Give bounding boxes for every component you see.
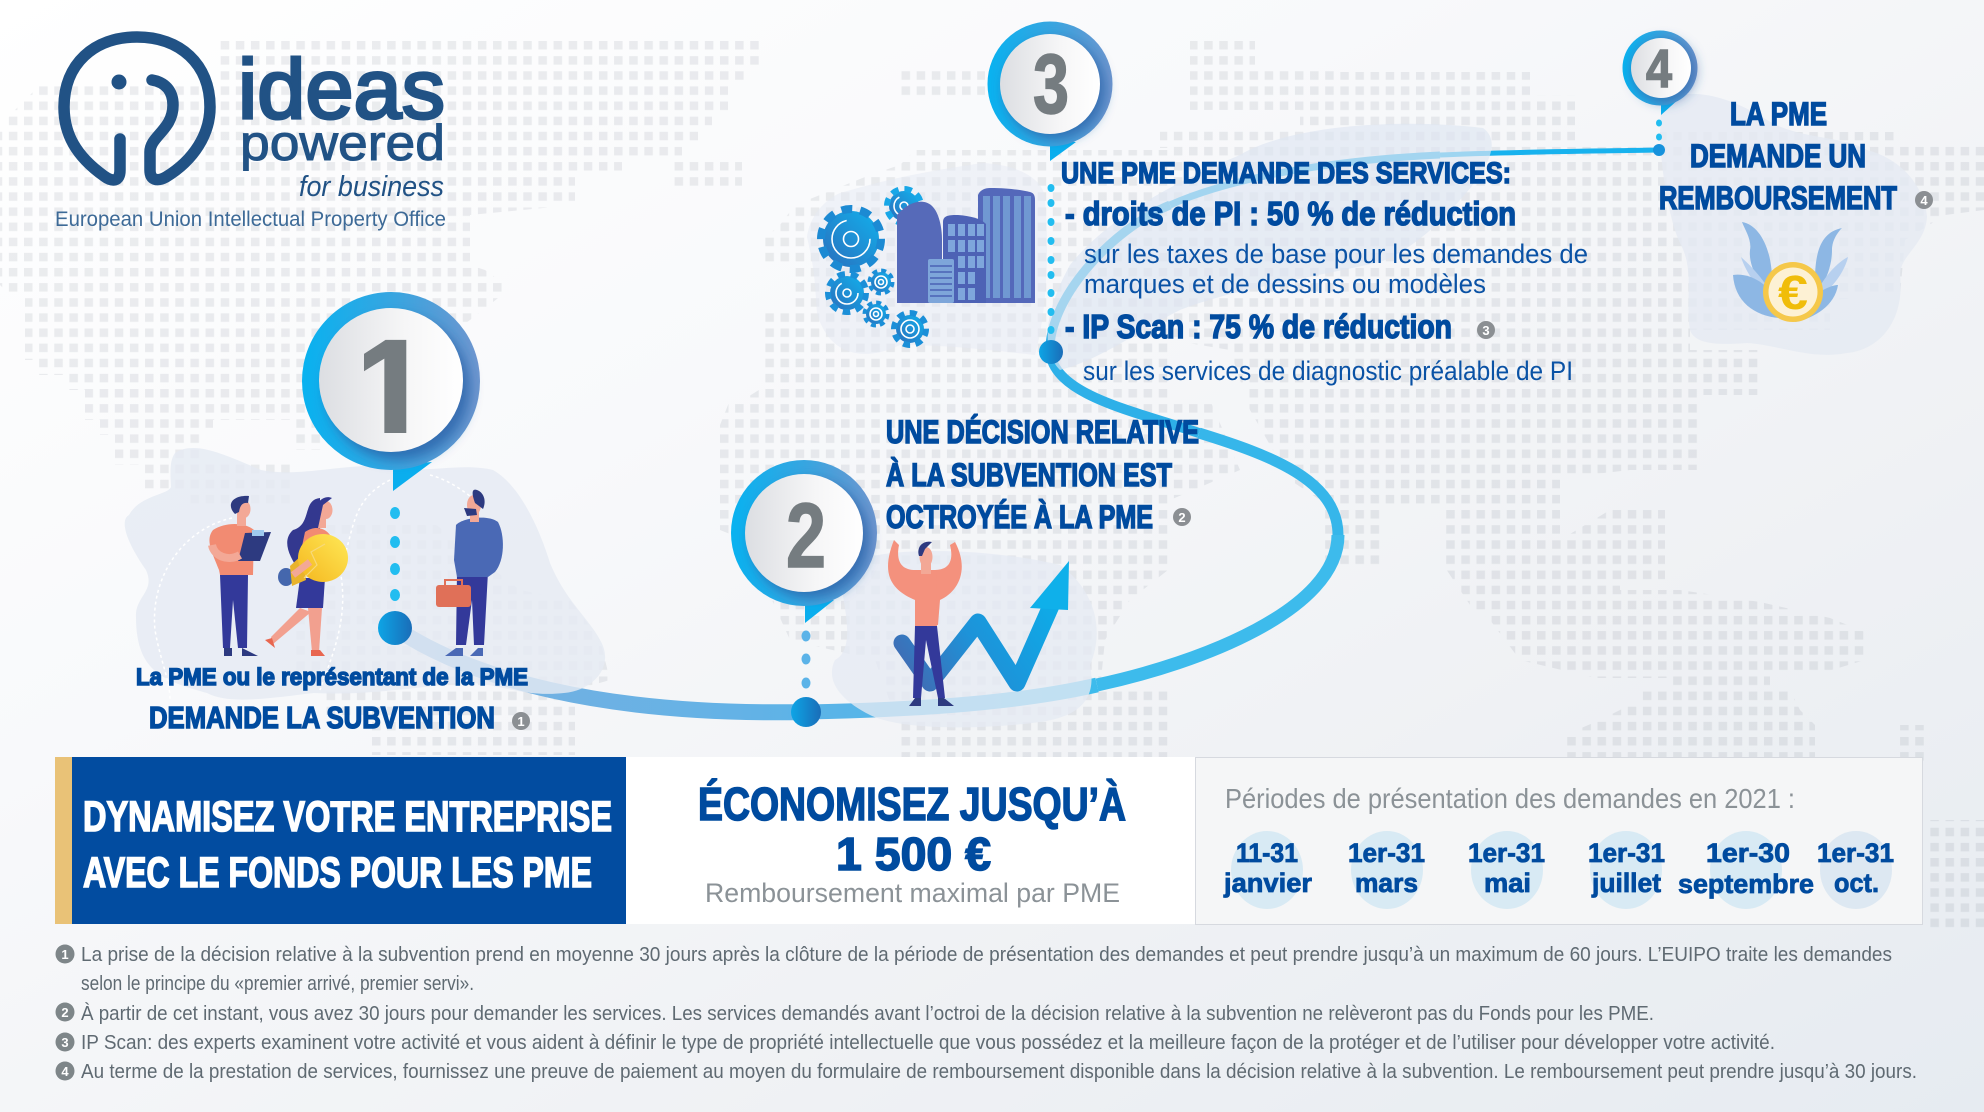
step 4 marker: 4 [1646,39,1672,99]
banner: application periods panel: 1er-31 [1348,838,1425,868]
step 3 marker [988,22,1112,161]
logo: ideas powered for business: powered [240,115,445,171]
step 1 connector dots [378,507,412,645]
illustration: euro coin with leaves: € [1778,267,1808,320]
banner: application periods panel: 1er-30 [1706,838,1790,868]
step 3 connector dots [1039,184,1063,364]
banner [55,757,1922,924]
logo: ideas powered for business: for business [299,171,444,203]
banner: application periods panel [1196,758,1922,924]
illustration: man with briefcase [436,490,503,656]
banner: gold accent [55,757,72,924]
banner: headline panel [72,757,626,924]
step 3 text block: marques et de dessins ou modèles [1084,269,1486,299]
step 2 heading: UNE DÉCISION RELATIVE [886,414,1199,450]
logo mark [64,37,210,180]
journey curve [395,150,1657,712]
dotted world map [0,41,1984,927]
banner: application periods panel: septembre [1678,869,1814,899]
step 2 marker [731,460,877,623]
logo wordmark: ideas [238,42,445,136]
step 4 heading: REMBOURSEMENT [1659,180,1897,216]
footnotes: La prise de la décision relative à la subvention prend en moyenne 30 jours après la clôture de la période de présentation des demandes et peut prendre jusqu’à un maximum de 60 jours. L’EUIPO traite les demandes [81,943,1892,966]
step 4 marker [1622,30,1698,115]
footnotes [56,943,1917,1083]
footnotes: 4 [61,1064,69,1079]
banner: headline panel: AVEC LE FONDS POUR LES PME [83,849,592,897]
step 4 heading: LA PME [1730,96,1827,132]
step 4 connector dots [1653,120,1665,156]
illustration: euro coin with leaves [1733,222,1848,322]
step 3 text block [1061,157,1588,386]
banner: savings panel: Remboursement maximal par PME [705,878,1120,908]
illustration: office buildings [897,188,1035,303]
banner: savings panel: 1 500 € [836,828,991,880]
step 2 marker: 2 [786,485,826,587]
step 4 heading: 4 [1920,193,1928,208]
banner: application periods panel: 11-31 [1236,838,1298,868]
step 3 text block: 3 [1482,323,1490,338]
step 3 text block: - droits de PI : 50 % de réduction [1065,195,1516,232]
step 1 marker: 1 [347,305,436,484]
step 4 heading: DEMANDE UN [1690,138,1866,174]
footnotes: selon le principe du «premier arrivé, premier servi». [81,972,474,995]
step 3 text block: sur les services de diagnostic préalable de PI [1083,356,1573,386]
step 3 marker: 3 [1033,37,1069,131]
step 2 heading [886,414,1199,535]
banner: application periods panel: mars [1355,868,1418,898]
step 1 caption: 1 [517,714,525,729]
illustration: man raising arms [888,540,962,706]
illustration: man with clipboard [209,496,271,656]
banner: application periods panel: janvier [1223,868,1312,898]
step 4 heading [1659,96,1933,216]
banner: application periods panel: 1er-31 [1588,838,1665,868]
step 2 heading: À LA SUBVENTION EST [886,457,1172,493]
step 1 caption [136,664,530,735]
banner: application periods panel: mai [1484,868,1531,898]
logo: ideas powered for business: European Union Intellectual Property Office [55,208,446,231]
dashed orbit around people [154,475,480,700]
step 2 heading: 2 [1178,510,1186,525]
banner: application periods panel: oct. [1834,868,1879,898]
step 3 text block: UNE PME DEMANDE DES SERVICES: [1061,157,1511,190]
illustration: woman with light bulb [265,497,348,656]
step 3 text block: - IP Scan : 75 % de réduction [1065,308,1452,345]
banner: headline panel: DYNAMISEZ VOTRE ENTREPRISE [83,793,612,841]
banner: application periods panel: juillet [1591,868,1661,898]
step 2 connector dots [791,630,821,727]
banner: savings panel [626,757,1196,924]
footnotes: À partir de cet instant, vous avez 30 jours pour demander les services. Les services demandés avant l’octroi de la décision relative à la subvention ne relèveront pas du Fonds pour les PME. [81,1002,1654,1025]
banner: savings panel: ÉCONOMISEZ JUSQU’À [698,778,1126,830]
footnotes: IP Scan: des experts examinent votre activité et vous aident à définir le type de propriété intellectuelle que vous possédez et la meilleure façon de la protéger et de l’utiliser pour développer votre activité. [81,1031,1775,1054]
step 2 heading: OCTROYÉE À LA PME [886,499,1153,535]
step 1 marker [302,292,480,491]
logo: ideas powered for business [55,37,446,231]
step 1 caption: La PME ou le représentant de la PME [136,664,528,691]
illustration: gears [821,189,926,345]
step 1 caption: DEMANDE LA SUBVENTION [149,700,495,735]
step 3 text block: sur les taxes de base pour les demandes de [1084,239,1588,269]
banner: application periods panel: 1er-31 [1468,838,1545,868]
illustration: rising arrow chart [902,561,1069,683]
banner: application periods panel: Périodes de présentation des demandes en 2021 : [1225,783,1795,814]
footnotes: 1 [61,947,69,962]
blobs behind the illustrations [125,94,1927,727]
banner: application periods panel: 1er-31 [1817,838,1894,868]
footnotes: 3 [61,1035,69,1050]
footnotes: 2 [61,1005,69,1020]
